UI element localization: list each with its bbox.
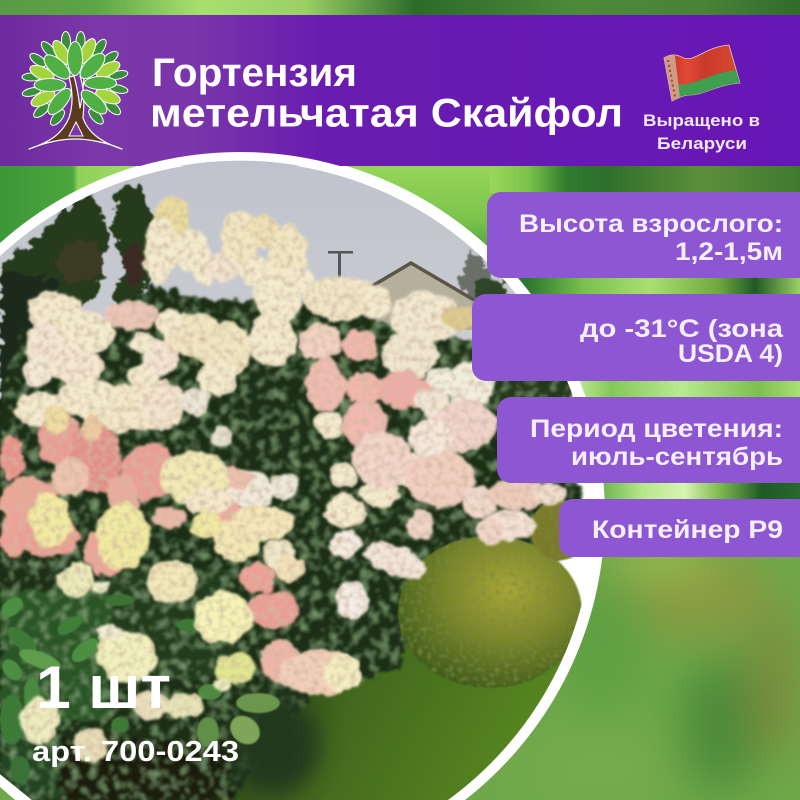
hydrangea flower heads: pale yellow [29, 451, 360, 692]
light green leaves [28, 36, 122, 110]
article number: арт. 700-0243 [32, 736, 239, 768]
caption: grown in Belarus [643, 111, 760, 153]
hydrangea flower heads: cream [14, 196, 494, 762]
utility pole [328, 251, 353, 279]
base under foliage [0, 400, 230, 800]
dark foliage mass [0, 285, 590, 800]
background trees [0, 182, 510, 400]
leaves [0, 593, 280, 784]
panel: flowering period: июль-сентябрь [571, 443, 783, 471]
golden round shrub [398, 500, 590, 688]
caption: grown in Belarus: Выращено в [643, 111, 760, 130]
caption: grown in Belarus: Беларуси [657, 134, 747, 153]
lawn [0, 640, 620, 800]
dark green outer leaves [21, 31, 129, 128]
panel: adult height: 1,2-1,5м [675, 238, 783, 266]
icon: Belarus flag [664, 45, 740, 101]
white arc of circle over banner [140, 152, 340, 166]
product title: Гортензия [152, 51, 357, 95]
panel: flowering period: Период цветения: [530, 415, 783, 443]
panel: container size [559, 499, 800, 557]
soft shadow between bush and lawn [230, 695, 320, 795]
panel: adult height [487, 192, 800, 278]
panel: frost hardiness: до -31°С (зона [580, 315, 784, 343]
company logo: tree [21, 31, 129, 149]
white circular frame [0, 151, 605, 800]
product title: метельчатая Скайфол [150, 92, 623, 136]
product title [150, 51, 623, 136]
panel: frost hardiness: USDA 4) [678, 340, 783, 368]
header banner [0, 15, 800, 166]
tree trunk and roots [29, 76, 122, 149]
quantity label: 1 шт [36, 654, 171, 721]
panel: flowering period [497, 397, 800, 483]
panel: container size: Контейнер Р9 [592, 516, 783, 544]
photo of hydrangea bush [0, 160, 620, 800]
house [352, 262, 475, 330]
panel: frost hardiness [472, 294, 800, 381]
bright green inner leaves [34, 42, 116, 118]
panel: adult height: Высота взрослого: [519, 210, 783, 238]
sky [0, 166, 573, 400]
hydrangea flower heads: pink [0, 301, 566, 695]
